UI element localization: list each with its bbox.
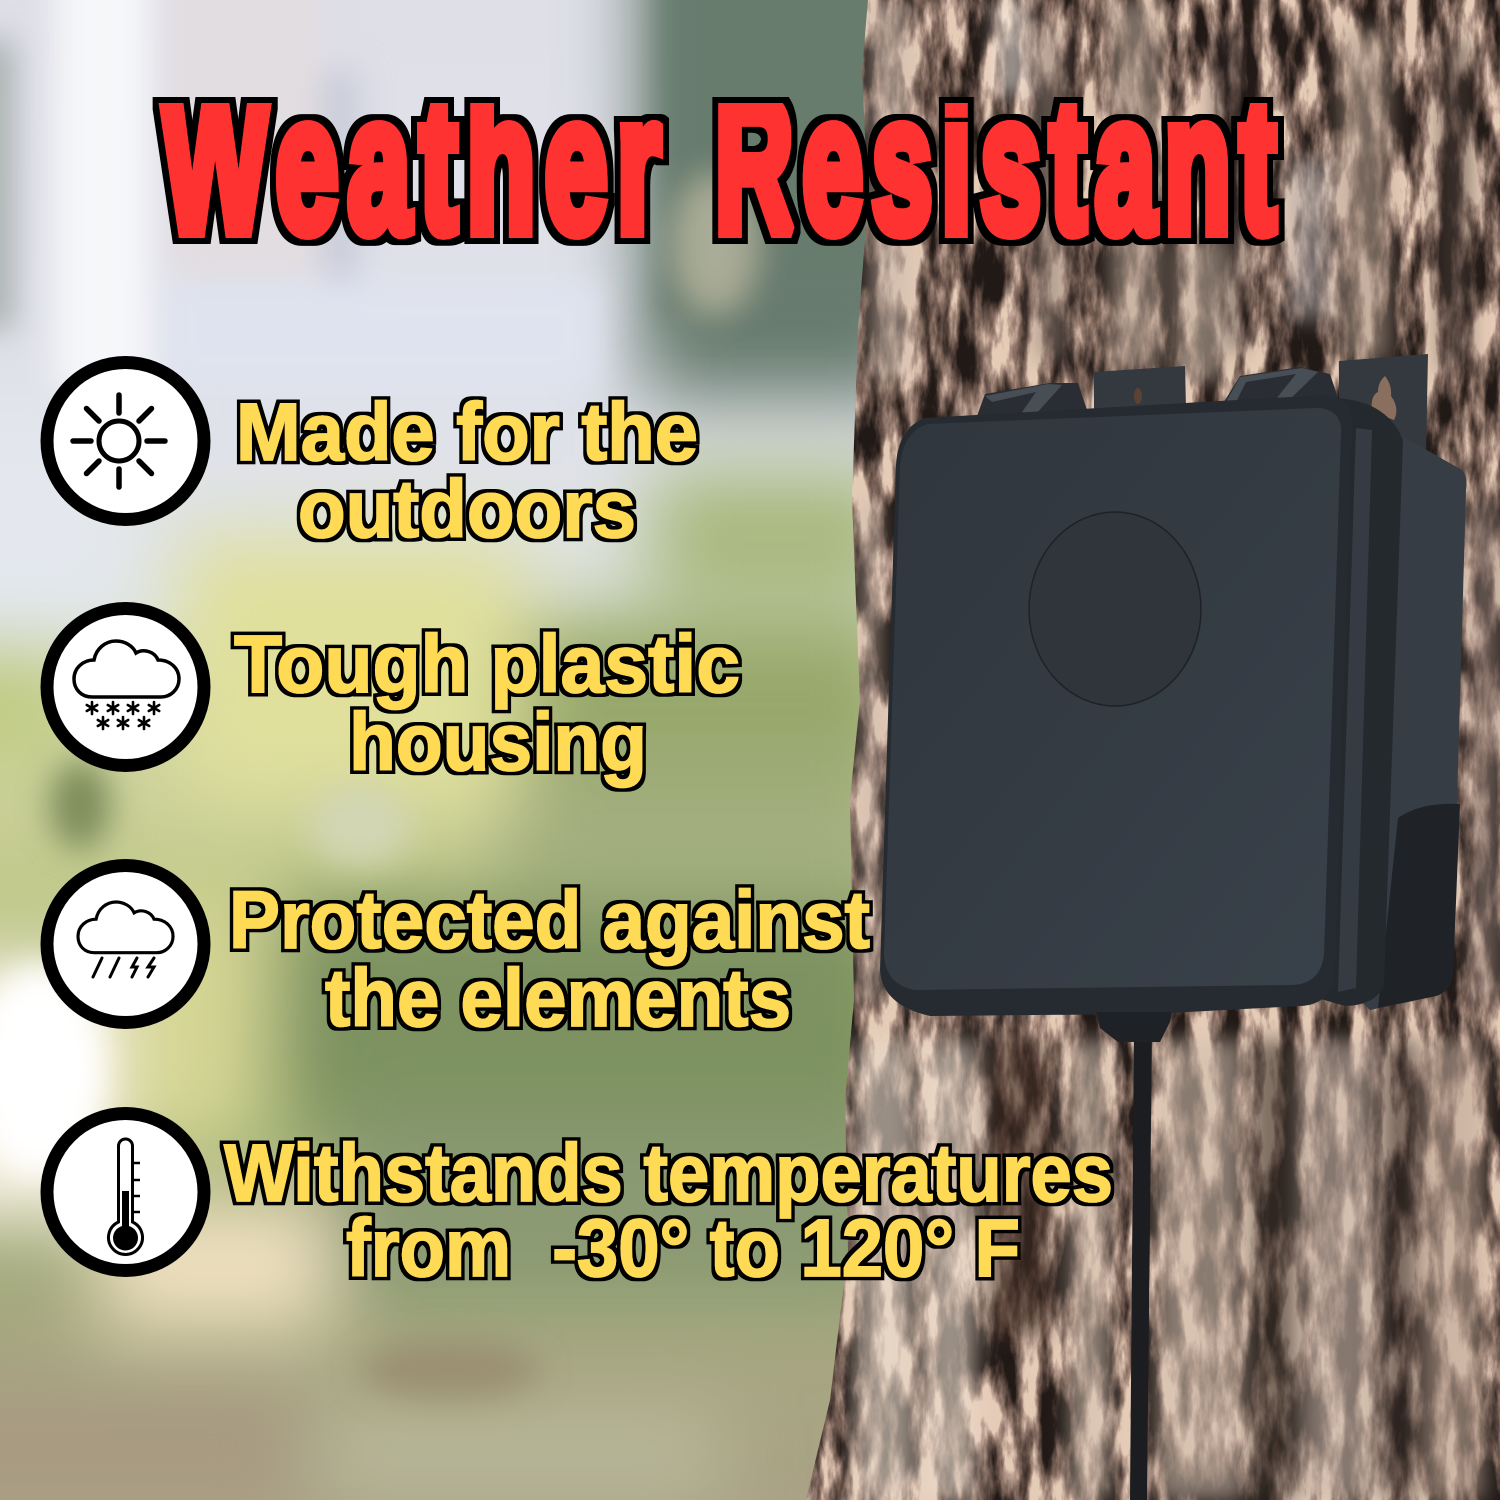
lid front face (880, 395, 1352, 1016)
icon: sun (47, 362, 204, 520)
text: made for the outdoors: outdoors (298, 464, 636, 555)
lid highlight strip (1338, 428, 1372, 992)
title: Weather (162, 56, 670, 272)
rear mounting bracket right (1339, 354, 1428, 452)
feature: made for the outdoors (47, 362, 698, 555)
text: withstands temperatures from -30 to 120 F (224, 1128, 1113, 1294)
text: protected against the elements: the elements (325, 953, 791, 1044)
rear mounting bracket middle (1094, 366, 1186, 412)
lid circle emboss (1029, 512, 1201, 706)
text: tough plastic housing: Tough plastic (234, 619, 740, 710)
text: made for the outdoors (236, 387, 698, 555)
text: protected against the elements (229, 875, 870, 1044)
side wall shadow (1378, 804, 1460, 1008)
clip right (1222, 367, 1338, 405)
tree trunk with bark (790, 0, 1500, 1500)
cable gland (1096, 1012, 1172, 1042)
lid side band (1290, 398, 1403, 1006)
text: tough plastic housing: housing (349, 697, 647, 788)
product: black weatherproof enclosure (880, 354, 1466, 1500)
text: withstands temperatures from -30 to 120 F: Withstands temperatures (224, 1128, 1113, 1219)
text: tough plastic housing (234, 619, 740, 788)
text: withstands temperatures from -30 to 120 F: from -30° to 120° F (346, 1203, 1020, 1294)
title (152, 97, 1285, 246)
icon: snow cloud (47, 608, 204, 766)
text: made for the outdoors: Made for the (236, 387, 698, 478)
power cable (1130, 1030, 1152, 1500)
feature: withstands temperatures (47, 1114, 1113, 1294)
enclosure side wall (1340, 432, 1466, 1010)
text: protected against the elements: Protected against (229, 875, 870, 966)
clip left (977, 383, 1087, 416)
feature: tough plastic housing (47, 608, 740, 788)
icon: thermometer (47, 1114, 204, 1270)
feature: protected against the elements (47, 866, 870, 1044)
icon: storm cloud (47, 866, 204, 1022)
